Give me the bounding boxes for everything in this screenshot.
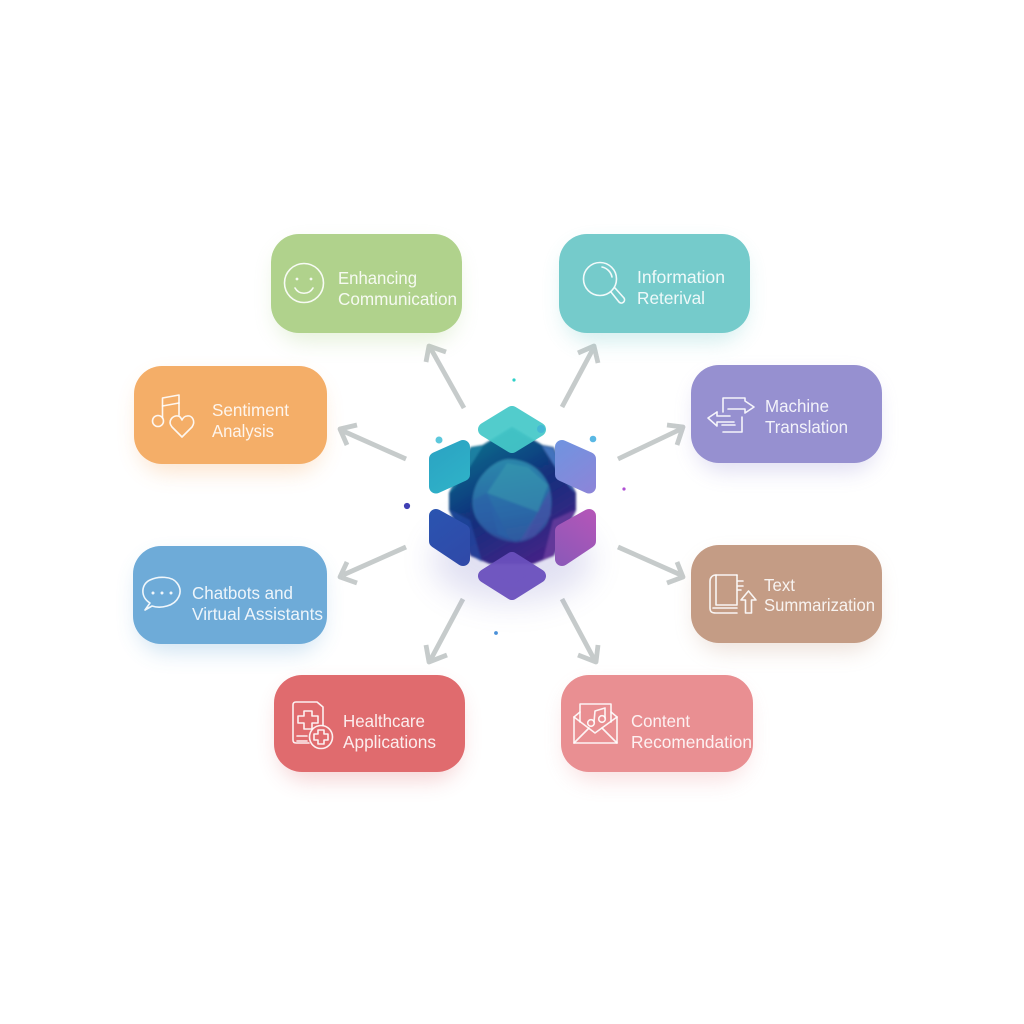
- icon: magnifying glass: [584, 262, 625, 303]
- icon: book and up arrow: [710, 575, 756, 613]
- label: Healthcare Applications: [343, 711, 436, 752]
- label: Information Retrieval: Reterival: [637, 288, 705, 308]
- panel: Machine Translation: [691, 365, 882, 471]
- icon: medical document: [293, 702, 332, 748]
- label: Information Retrieval: Information: [637, 267, 725, 287]
- label: Text Summarization: Text: [764, 575, 795, 595]
- label: Enhancing Communication: Enhancing: [338, 268, 417, 288]
- label: Sentiment Analysis: [212, 400, 289, 441]
- label: Machine Translation: Machine: [765, 396, 829, 416]
- icon: chat bubble: [143, 577, 180, 610]
- label: Enhancing Communication: Communication: [338, 289, 457, 309]
- arrow: to Text Summarization: [618, 547, 683, 583]
- label: Enhancing Communication: [338, 268, 457, 309]
- hub petal: left upper: [436, 447, 463, 486]
- arrow: to Enhancing Communication: [426, 346, 464, 408]
- label: Machine Translation: Translation: [765, 417, 848, 437]
- label: Chatbots and Virtual Assistants: [192, 583, 323, 624]
- hub petal: left lower: [436, 516, 463, 559]
- icon: envelope with music note: [574, 704, 617, 743]
- label: Content Recommendation: Content: [631, 711, 690, 731]
- icon: music note and heart: [152, 395, 194, 437]
- arrow: to Sentiment Analysis: [340, 425, 406, 459]
- central hub icon: [432, 413, 592, 602]
- panel: Sentiment Analysis: [134, 366, 327, 472]
- label: Content Recommendation: [631, 711, 752, 752]
- label: Text Summarization: Summarization: [764, 595, 875, 615]
- label: Machine Translation: [765, 396, 848, 437]
- hub petal: right upper: [562, 447, 589, 486]
- hub petal: right lower: [562, 516, 589, 559]
- panel: Enhancing Communication: [271, 234, 462, 341]
- panel: Chatbots and Virtual Assistants: [133, 546, 327, 652]
- label: Content Recommendation: Recomendation: [631, 732, 752, 752]
- panel: Information Retrieval: [559, 234, 750, 341]
- arrow: to Information Retrieval: [562, 346, 598, 407]
- panel: Healthcare Applications: [274, 675, 465, 780]
- label: Text Summarization: [764, 575, 875, 615]
- decorative particles: [404, 378, 626, 635]
- icon: translation arrows: [708, 398, 754, 432]
- arrow: to Content Recommendation: [562, 599, 598, 662]
- hub core: [450, 428, 575, 563]
- label: Sentiment Analysis: Sentiment: [212, 400, 289, 420]
- panel: Text Summarization: [691, 545, 882, 651]
- hub petal: top: [485, 413, 539, 446]
- label: Healthcare Applications: Healthcare: [343, 711, 425, 731]
- label: Chatbots and Virtual Assistants: Chatbots and: [192, 583, 293, 603]
- arrow: to Machine Translation: [618, 425, 683, 459]
- arrow: to Chatbots and Virtual Assistants: [340, 547, 406, 583]
- label: Chatbots and Virtual Assistants: Virtual Assistants: [192, 604, 323, 624]
- arrow: to Healthcare Applications: [426, 599, 463, 662]
- label: Sentiment Analysis: Analysis: [212, 421, 274, 441]
- hub petal: bottom: [485, 559, 539, 593]
- label: Healthcare Applications: Applications: [343, 732, 436, 752]
- panel: Content Recommendation: [561, 675, 753, 780]
- icon: smiley face: [284, 264, 324, 302]
- label: Information Retrieval: [637, 267, 725, 308]
